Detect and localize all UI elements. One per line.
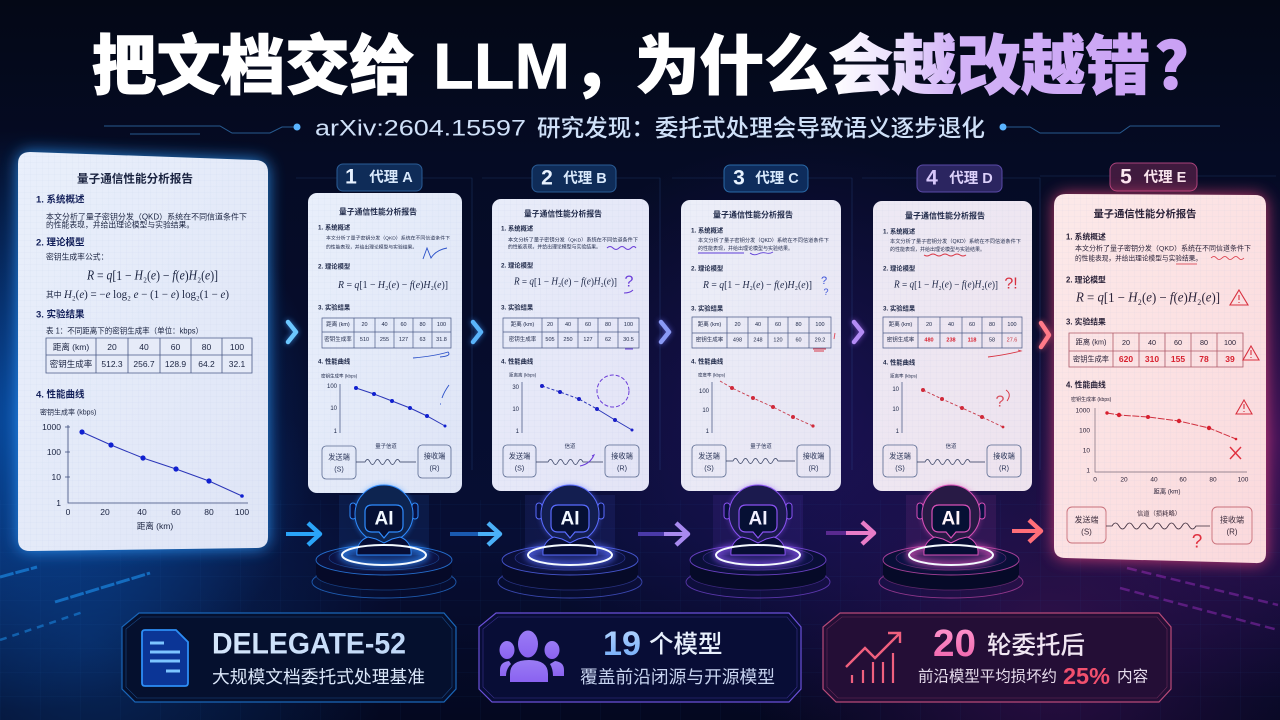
doc E table: 距离 (km) [1076,338,1106,346]
badge: agent E [1110,163,1197,191]
doc A text: 量子通信性能分析报告 [339,206,417,216]
section 4: chart: 1000 [42,422,61,432]
doc C channel diagram: (R) [809,464,818,472]
section 2: 其中 [46,290,62,300]
section 2 [36,236,229,301]
doc B text: 1. 系统概述 [501,224,534,232]
doc A channel diagram: 量子信道 [375,442,397,450]
doc A table [322,318,451,348]
doc B chart: 10 [512,407,520,413]
doc C table [692,317,831,348]
annotations C [698,252,835,351]
section 1: 的性能表现，并给出理论模型与实验结果。 [46,220,194,230]
doc E channel diagram: (R) [1226,528,1238,536]
doc E text: 量子通信性能分析报告 [1094,208,1196,220]
doc C table: 40 [755,322,761,328]
doc B text: 量子通信性能分析报告 [524,208,602,218]
section 3: table: 512.3 [101,359,123,369]
doc A chart: 密钥生成率 (kbps) [321,372,358,380]
doc E channel diagram [1067,507,1252,552]
panel: agent D document [873,201,1032,491]
doc B text: 3. 实验结果 [501,302,534,312]
doc C table: 距离 (km) [698,320,721,328]
doc E channel diagram: (S) [1081,528,1092,536]
doc A table: 密钥生成率 [324,335,352,343]
doc C text: 本文分析了量子密钥分发（QKD）系统在不同信道条件下 [698,237,829,244]
doc D channel diagram: (R) [999,464,1009,472]
doc A table: 距离 (km) [326,320,350,328]
doc C table: 60 [775,322,781,328]
subtitle: arXiv:2604.15597 [315,116,526,140]
doc C table: 120 [773,338,783,344]
doc E table: 80 [1200,338,1208,347]
doc C table: 100 [815,322,825,328]
doc E table: 39 [1225,354,1235,364]
flow arrows between robots [286,520,1041,545]
doc C table: 60 [795,338,802,344]
stat caption: 内容 [1117,668,1148,686]
section 4: chart: 4. 性能曲线 [36,388,85,400]
section 2: 2. 理论模型 [36,236,85,248]
doc D chart: 10 [892,407,900,413]
icon: document [142,630,188,686]
doc B text: R = q[1 − H₂(e) − f(e)H₂(e)] [513,276,617,288]
doc E text: 1. 系统概述 [1066,232,1106,242]
doc A chart: 1 [334,429,338,435]
doc D chart: 1 [896,429,900,435]
doc E channel diagram: ? [1192,532,1202,552]
stat title: 19 [603,625,641,663]
icon: people [500,630,564,682]
doc C text: 的性能表现，并给出理论模型与实验结果。 [698,245,793,252]
icon: rising chart [846,633,900,683]
title [92,30,1220,102]
doc B table: 127 [583,337,593,343]
badge: agent E: 5 [1120,166,1132,188]
doc A text: 2. 理论模型 [318,262,350,270]
doc D table: 20 [926,322,932,328]
doc A text: 3. 实验结果 [318,302,351,312]
doc D text [883,210,1021,312]
doc A channel diagram: 接收端 [424,452,445,460]
doc C channel diagram [692,442,830,477]
doc D table [883,317,1022,348]
doc D text: R = q[1 − H₂(e) − f(e)H₂(e)] [893,280,998,290]
doc E text: 本文分析了量子密钥分发（QKD）系统在不同信道条件下 [1075,244,1251,252]
section 3: table: 表 1：不同距离下的密钥生成率（单位：kbps） [46,326,203,336]
section 4: chart: 80 [204,507,214,517]
doc B table: 62 [605,337,611,343]
section 4: chart: 60 [171,507,181,517]
section 3: table: 100 [230,342,244,352]
section 1 [36,194,247,230]
badge: agent D: 4 [926,166,938,190]
section 3: table: 密钥生成率 [50,359,93,369]
section 3: table: 80 [202,342,211,352]
doc E chart: 10 [1083,448,1090,454]
doc A text: R = q[1 − H₂(e) − f(e)H₂(e)] [337,279,448,291]
doc A chart [318,356,446,435]
section 2: R = q[1 − H₂(e) − f(e)H₂(e)] [86,268,218,282]
doc C channel diagram: 接收端 [803,452,824,460]
doc A table: 255 [380,337,389,343]
doc B channel diagram: (S) [515,464,524,472]
stat caption: 大规模文档委托式处理基准 [212,667,425,687]
doc D text: 1. 系统概述 [883,226,916,236]
doc C table: 498 [733,338,742,344]
robot B: AI [560,508,580,530]
doc A channel diagram: 发送端 [328,452,350,462]
doc B text: 本文分析了量子密钥分发（QKD）系统在不同信道条件下 [508,236,638,244]
doc B table [503,318,639,348]
doc E table: 78 [1199,354,1209,364]
doc A table: 40 [381,322,388,328]
warning triangles and underlines [1176,256,1259,414]
title: ？ [1155,30,1220,102]
doc E text [1066,208,1251,326]
doc E chart: 1 [1086,468,1090,474]
doc C channel diagram: (S) [704,464,714,472]
annotations C: ? [823,287,829,297]
doc D text: 本文分析了量子密钥分发（QKD）系统在不同信道条件下 [890,238,1021,245]
section 4: chart: 100 [47,447,61,457]
doc A table: 63 [419,337,426,343]
doc E text: R = q[1 − H₂(e) − f(e)H₂(e)] [1075,290,1220,306]
doc B table: 密钥生成率 [509,335,537,343]
doc E table: 20 [1122,338,1130,347]
stat caption: 覆盖前沿闭源与开源模型 [580,667,775,687]
section 3: table: 20 [107,342,117,352]
doc A table: 127 [399,337,408,343]
doc C table: 20 [734,322,741,328]
badge: agent B: 2 [541,166,553,190]
annotations D [924,254,1021,410]
doc A channel diagram: (S) [334,464,344,474]
doc E channel diagram: 发送端 [1074,514,1098,524]
doc C chart: 密度率 (kbps) [698,372,726,378]
doc A channel diagram: (R) [430,464,439,472]
doc E table: 100 [1224,338,1236,347]
doc D chart [883,358,1004,435]
doc C table: 密钥生成率 [696,336,724,344]
badge: agent C: 3 [733,166,745,190]
section 4: chart: 密钥生成率 (kbps) [40,408,96,416]
doc A table: 60 [400,322,407,328]
doc E chart: 60 [1179,476,1187,484]
badge: agent D [917,165,1002,192]
doc C table: 248 [753,338,763,344]
doc B table: 250 [563,337,573,343]
doc A chart: 100 [327,384,338,390]
doc B table: 100 [624,322,633,328]
badge: agent C [724,165,808,192]
doc D channel diagram [883,442,1021,477]
doc A text: 1. 系统概述 [318,222,351,232]
doc B channel diagram [503,442,639,477]
stat panel: 20 rounds [823,613,1171,702]
doc D table: 480 [924,338,934,344]
doc A table: 31.8 [436,337,447,343]
doc B chart: 距离离 (kbps) [509,372,537,378]
doc E chart: 0 [1093,476,1097,484]
doc B channel diagram: 信道 [565,442,576,450]
doc B channel diagram: (R) [617,464,627,472]
annotations B: ? [625,274,634,290]
doc A chart: 10 [330,406,338,412]
robot C [686,485,830,598]
doc A text [318,206,450,312]
doc C chart: 10 [702,408,710,414]
section 4: chart: 20 [100,507,110,517]
section 4: chart: 1 [56,498,61,508]
panel: agent A document [308,193,462,493]
doc E table: 620 [1119,354,1133,364]
doc E table: 155 [1171,354,1185,364]
doc D table: 238 [946,338,956,344]
doc D chart: 4. 性能曲线 [883,358,916,366]
doc E chart: 距离 (km) [1154,486,1180,496]
doc D channel diagram: (S) [895,464,905,472]
doc E table: 40 [1148,338,1156,347]
doc E chart: 80 [1209,476,1217,484]
doc E chart: 20 [1120,476,1128,484]
robot C: AI [748,508,768,530]
doc A table: 80 [419,322,426,328]
doc A table: 20 [361,322,368,328]
doc E chart: 4. 性能曲线 [1066,380,1106,390]
doc D table: 距离 (km) [889,320,912,328]
stat panel: DELEGATE-52 [122,613,456,702]
stat caption: 25% [1063,663,1110,689]
annotations B [580,246,636,466]
doc B text: 2. 理论模型 [501,260,533,270]
doc title: 量子通信性能分析报告 [77,172,193,186]
doc E text: 的性能表现，并给出理论模型与实验结果。 [1075,254,1202,262]
chevrons between documents [288,322,1049,347]
section 4: chart: 100 [235,507,249,517]
doc B chart: 1 [516,429,520,435]
badge: agent D: 代理 D [949,170,993,187]
doc D channel diagram: 发送端 [889,452,911,460]
doc D text: 3. 实验结果 [883,304,916,312]
doc A channel diagram [322,442,451,479]
doc E chart: 40 [1150,476,1158,484]
section 1: 1. 系统概述 [36,194,85,206]
doc D channel diagram: 接收端 [993,452,1015,460]
doc B table: 20 [547,322,553,328]
doc E table: 310 [1145,354,1159,364]
doc D chart: 距离率 (kbps) [890,372,918,380]
section 3: table: 3. 实验结果 [36,308,85,320]
doc D table: 密钥生成率 [887,336,915,344]
doc B table: 80 [605,322,611,328]
annotations D: ? [996,394,1005,410]
badge: agent E: 代理 E [1144,169,1187,186]
doc D table: 58 [989,338,995,344]
doc D table: 60 [969,322,975,328]
badge: agent B: 代理 B [563,170,607,187]
doc C text: 量子通信性能分析报告 [713,210,793,220]
subtitle [104,115,1220,141]
doc E chart: 1000 [1076,408,1090,414]
doc E table [1069,333,1243,367]
section 2: 密钥生成率公式： [46,252,108,262]
doc B channel diagram: 发送端 [509,452,530,460]
stat title: 个模型 [649,630,722,658]
section 4: chart: 40 [137,507,147,517]
doc D table: 100 [1007,322,1017,328]
doc D channel diagram: 信道 [946,442,957,450]
title: 为什么会 [635,30,893,102]
badge: agent A: 代理 A [369,169,413,186]
stat title: DELEGATE-52 [212,628,406,660]
panel: agent E document [1054,194,1266,563]
doc C chart [691,356,815,435]
doc C chart: 1 [706,429,710,435]
stat title: 轮委托后 [987,632,1085,660]
doc D text: 的性能表现，并给出理论模型与实验结果。 [890,246,985,253]
doc D table: 40 [948,322,954,328]
stat panel: 19 models [479,613,801,702]
doc E channel diagram: 信道（损耗略） [1137,508,1181,518]
annotations D: ?! [1004,276,1018,292]
title: 越改越错 [892,30,1150,102]
robot A: AI [374,508,394,530]
section 3: table: 256.7 [133,359,155,369]
section 3: table [36,308,252,373]
stat caption [918,663,1148,689]
section 2: H₂(e) = −e log₂ e − (1 − e) log₂(1 − e) [63,289,229,301]
doc C text: 2. 理论模型 [691,264,723,272]
title: 把文档交给 [92,30,414,102]
doc B table: 60 [585,322,591,328]
title: LLM [433,30,570,102]
stat title [933,623,1085,665]
stat caption: 前沿模型平均损坏约 [918,668,1057,686]
doc C text: 3. 实验结果 [691,304,724,312]
doc E chart: 100 [1079,428,1090,434]
panel: source document [18,152,268,551]
badge: agent A: 1 [345,166,357,188]
doc E table: 60 [1174,338,1182,347]
doc C text: R = q[1 − H₂(e) − f(e)H₂(e)] [702,279,812,291]
doc D table: 80 [989,322,995,328]
doc C chart: 100 [699,389,710,395]
doc B chart: 30 [512,385,520,391]
doc C channel diagram: 量子信道 [750,442,772,450]
doc B channel diagram: 接收端 [611,452,633,460]
doc B table: 505 [545,337,555,343]
stat title [603,625,722,663]
doc E chart: 密钥生成率 (kbps) [1071,396,1112,403]
doc B table: 30.5 [623,337,634,343]
robot D [879,485,1023,598]
doc D table: 27.6 [1007,338,1017,344]
doc D text: 2. 理论模型 [883,264,915,272]
doc C text [691,210,829,312]
section 4: chart [36,388,249,531]
doc E text: 2. 理论模型 [1066,274,1106,284]
doc C text: 1. 系统概述 [691,226,724,234]
robot D: AI [942,508,960,530]
badge: agent C: 代理 C [755,170,799,187]
doc C table: 29.2 [815,338,825,344]
section 3: table: 距离 (km) [53,342,89,352]
panel: agent C document [681,200,841,491]
section 3: table: 32.1 [229,359,246,369]
doc B chart: 4. 性能曲线 [501,356,534,366]
doc A chart: 4. 性能曲线 [318,356,351,366]
section 3: table: 40 [139,342,149,352]
doc A table: 510 [360,337,369,343]
doc E text: 3. 实验结果 [1066,316,1106,326]
doc A text: 本文分析了量子密钥分发（QKD）系统在不同信道条件下 [326,234,450,242]
annotations A [413,248,449,404]
section 1: 本文分析了量子密钥分发（QKD）系统在不同信道条件下 [46,212,247,222]
doc B table: 距离 (km) [511,320,534,328]
doc B text: 的性能表现，并给出理论模型与实验结果。 [508,244,601,250]
doc C channel diagram: 发送端 [698,452,720,460]
doc D chart: 10 [892,387,900,393]
doc B chart [501,356,634,435]
doc E chart: 100 [1238,476,1249,484]
subtitle: 研究发现：委托式处理会导致语义逐步退化 [537,115,985,141]
doc E chart [1066,380,1249,496]
robot B [498,485,642,598]
doc D table: 118 [968,338,976,344]
section 4: chart: 0 [66,507,71,517]
section 3: table: 128.9 [165,359,186,369]
doc E table: 密钥生成率 [1073,354,1109,364]
badge: agent B [532,165,616,192]
doc A table: 100 [437,322,446,328]
section 4: chart: 10 [52,472,61,482]
panel: agent B document [492,199,649,491]
doc E channel diagram: 接收端 [1220,514,1244,524]
section 3: table: 60 [171,342,180,352]
doc B table: 40 [565,322,571,328]
section 4: chart: 距离 (km) [137,521,173,531]
annotations C: ? [821,275,827,287]
doc D text: 量子通信性能分析报告 [905,210,985,220]
stat title: 20 [933,623,976,665]
doc A text: 的性能表现，并给出理论模型与实验结果。 [326,244,417,250]
robot A [312,485,456,598]
badge: agent A [337,164,422,191]
title: ， [572,30,637,102]
doc C table: 80 [795,322,802,328]
section 3: table: 64.2 [198,359,215,369]
doc B text [501,208,638,312]
doc C chart: 4. 性能曲线 [691,356,724,366]
